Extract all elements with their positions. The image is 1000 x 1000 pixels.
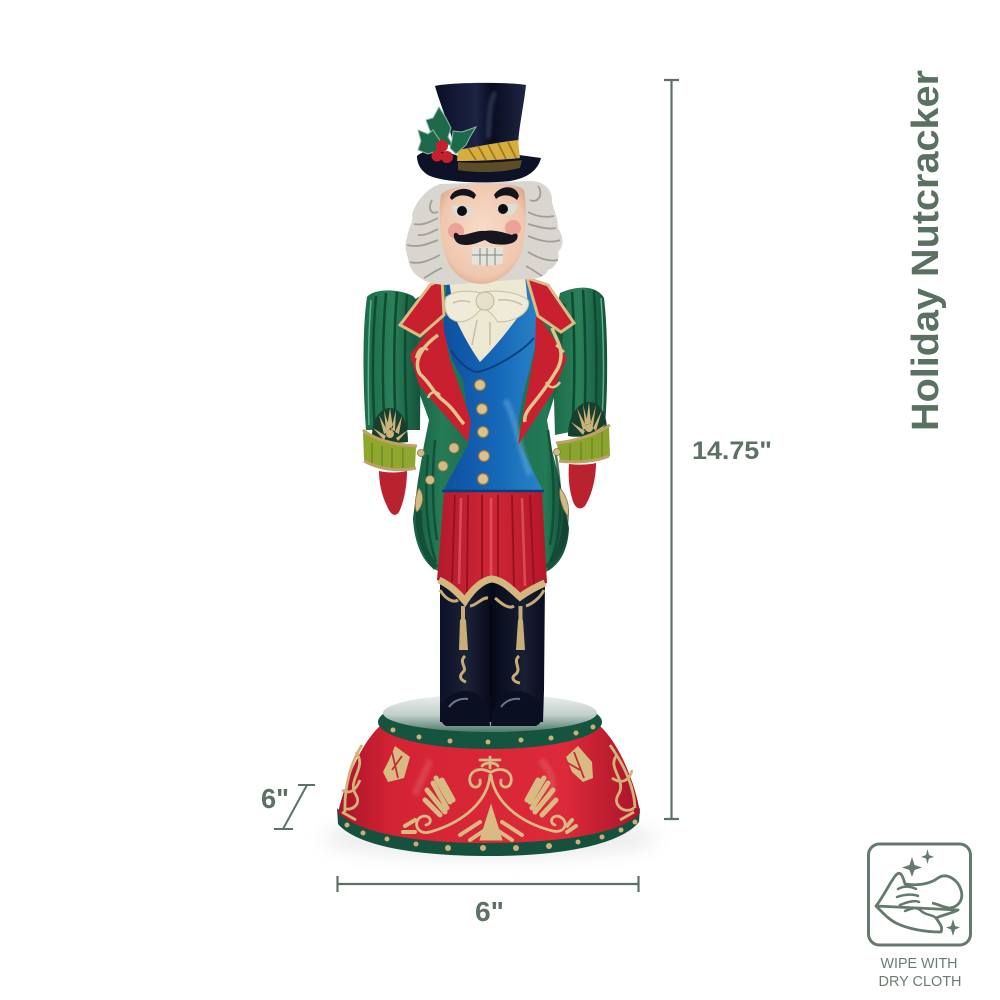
right sleeve [552, 288, 607, 435]
plate top [383, 694, 597, 732]
vest buttons [474, 380, 490, 484]
face [440, 184, 526, 284]
blue vest [442, 278, 544, 491]
boot trim and tassels [439, 579, 545, 683]
icon caption: DRY CLOTH [878, 974, 962, 990]
teeth [472, 247, 503, 266]
green rim [378, 695, 602, 749]
berries [432, 140, 453, 163]
red drum [338, 722, 640, 843]
holly leaves [418, 107, 476, 154]
width dimension: 6" [475, 896, 504, 927]
rim studs [390, 724, 596, 744]
height dimension line [664, 80, 679, 819]
cuffs [363, 425, 610, 470]
icon caption [878, 956, 962, 990]
hat band [457, 140, 520, 161]
hair [405, 181, 563, 285]
care icon: wipe with dry cloth [868, 844, 970, 990]
boots [440, 580, 545, 726]
hands [379, 463, 596, 515]
base shadow [322, 818, 658, 858]
vertical title: Holiday Nutcracker [905, 70, 947, 431]
moustache [454, 230, 518, 245]
icon: hand and cloth [876, 873, 962, 932]
nutcracker figurine [322, 83, 658, 858]
base bottom band [337, 808, 640, 856]
depth dimension: 6" [261, 783, 289, 814]
coat body [413, 283, 569, 572]
width dimension [338, 876, 638, 927]
cheeks [448, 220, 521, 239]
left lapel [400, 279, 471, 442]
eyebrows [450, 187, 519, 200]
bottom studs [344, 820, 638, 851]
base [337, 694, 640, 856]
right lapel [518, 278, 574, 445]
icon caption: WIPE WITH [880, 956, 958, 972]
side gold leaves [383, 746, 593, 782]
top hat [417, 83, 541, 182]
icon frame [868, 844, 970, 945]
crown [435, 83, 526, 150]
icon: sparkles [902, 849, 960, 936]
cravat [445, 274, 529, 362]
brim [417, 151, 541, 182]
sleeve ornaments [372, 402, 607, 443]
depth dimension [261, 783, 315, 829]
coat buttons [415, 443, 569, 516]
left sleeve [364, 290, 421, 430]
red skirt [437, 492, 547, 600]
centre gold ornament [403, 757, 576, 840]
edge ornaments [342, 745, 635, 820]
eyes [451, 204, 518, 217]
height label: 14.75" [692, 437, 772, 465]
